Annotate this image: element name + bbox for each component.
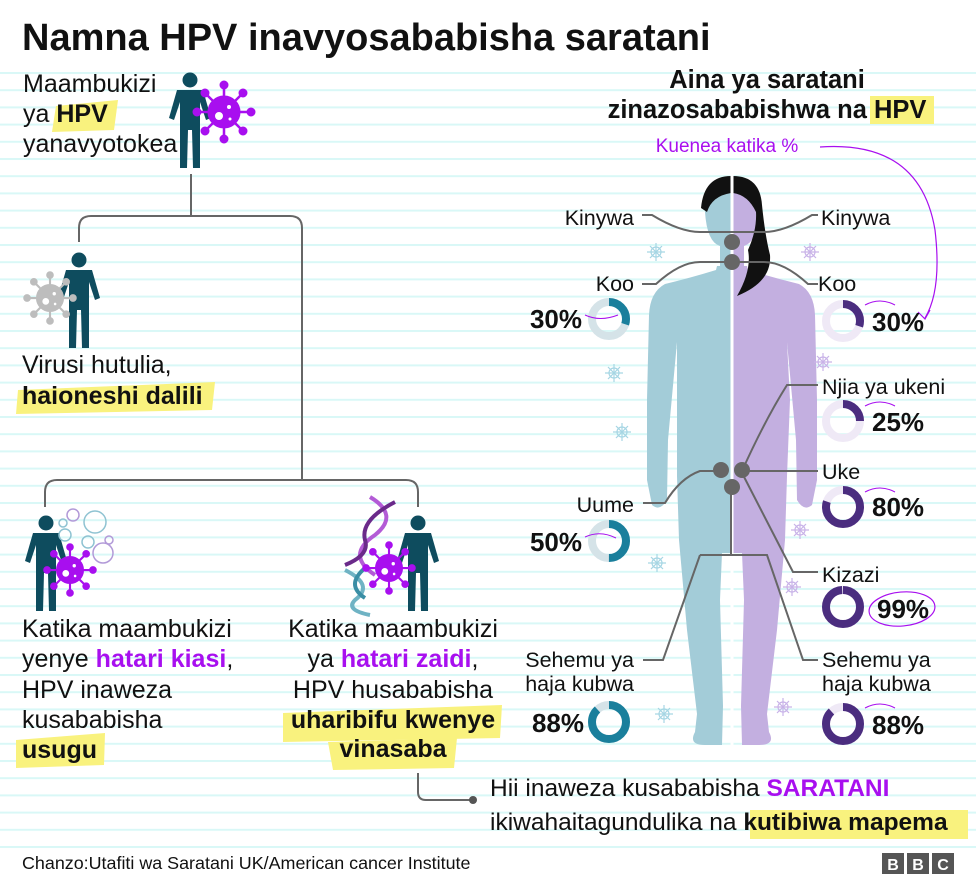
labels body: Kinywa [565, 206, 634, 230]
donut: male anus 88%: 88% [532, 708, 584, 738]
legend: prevalence: Kuenea katika % [656, 136, 798, 157]
labels body: Uume [577, 493, 634, 517]
donut: male throat 30% [530, 302, 626, 336]
donut: female anus 88% [826, 704, 924, 741]
block: virus dormant: haioneshi dalili [22, 382, 203, 410]
block: low risk: yenye hatari kiasi, [22, 645, 233, 673]
icon: DNA, virus, person [345, 497, 439, 615]
logo: BBC: B [887, 857, 899, 874]
donut: male anus 88% [532, 705, 626, 739]
labels body: Kinywa [821, 206, 890, 230]
block: low risk: usugu [22, 736, 97, 764]
block: HPV infection: Maambukizi [23, 70, 156, 98]
callout: cancer: ikiwahaitagundulika na kutibiwa mapema [490, 809, 948, 836]
icon: person with purple virus [169, 72, 255, 168]
heading: cancer types: Aina ya saratani [669, 66, 865, 94]
labels body: Sehemu ya [525, 648, 634, 672]
logo: BBC: C [937, 857, 949, 874]
donut: female vagina 25%: 25% [872, 407, 924, 437]
logo: BBC [882, 853, 954, 874]
block: high risk: ya hatari zaidi, [308, 645, 478, 673]
block: virus dormant [16, 252, 215, 414]
labels body [525, 206, 945, 696]
donut: female anus 88%: 88% [872, 710, 924, 740]
tree connectors [45, 174, 473, 800]
title: Namna HPV inavyosababisha saratani [22, 17, 711, 59]
hair [701, 176, 731, 212]
donut: male penis 50% [530, 524, 626, 558]
labels body: Njia ya ukeni [822, 375, 945, 399]
legend: prevalence [656, 136, 937, 319]
donut: female throat 30% [826, 301, 924, 338]
block: high risk: uharibifu kwenye [291, 706, 495, 734]
donut: female cervix 99% [826, 589, 936, 629]
block: high risk: Katika maambukizi [288, 615, 498, 643]
donut: female vulva 80% [826, 488, 924, 524]
figure: body [647, 172, 817, 748]
block: high risk [283, 497, 502, 770]
labels body: haja kubwa [525, 672, 634, 696]
labels body: Kizazi [822, 563, 879, 587]
donut: male throat 30%: 30% [530, 304, 582, 334]
donut: female vagina 25% [826, 402, 924, 438]
donut: male penis 50%: 50% [530, 527, 582, 557]
connectors body [642, 215, 818, 660]
heading: cancer types [608, 66, 934, 124]
labels body: haja kubwa [822, 672, 931, 696]
block: HPV infection: yanavyotokea [23, 130, 177, 158]
callout: cancer [490, 775, 968, 839]
donut: female throat 30%: 30% [872, 307, 924, 337]
heading: cancer types: zinazosababishwa na HPV [608, 96, 926, 124]
block: high risk: HPV husababisha [293, 676, 493, 704]
icon: person with grey virus [24, 252, 100, 348]
block: low risk: kusababisha [22, 706, 162, 734]
decorative viruses [605, 243, 673, 723]
block: virus dormant: Virusi hutulia, [22, 351, 172, 379]
callout: cancer: Hii inaweza kusababisha SARATANI [490, 775, 889, 802]
block: low risk: HPV inaweza [22, 676, 172, 704]
donut: female cervix 99%: 99% [877, 594, 929, 624]
labels body: Sehemu ya [822, 648, 931, 672]
block: HPV infection: ya HPV [23, 100, 108, 128]
labels body: Uke [822, 460, 860, 484]
block: low risk [16, 509, 233, 768]
block: high risk: vinasaba [339, 735, 448, 763]
labels body: Koo [596, 272, 634, 296]
footer source: Chanzo:Utafiti wa Saratani UK/American cancer Institute [22, 853, 471, 873]
labels body: Koo [818, 272, 856, 296]
logo: BBC: B [912, 857, 924, 874]
icon: person, virus, cells [25, 509, 113, 611]
block: low risk: Katika maambukizi [22, 615, 232, 643]
donut: female vulva 80%: 80% [872, 492, 924, 522]
block: HPV infection [23, 70, 255, 168]
